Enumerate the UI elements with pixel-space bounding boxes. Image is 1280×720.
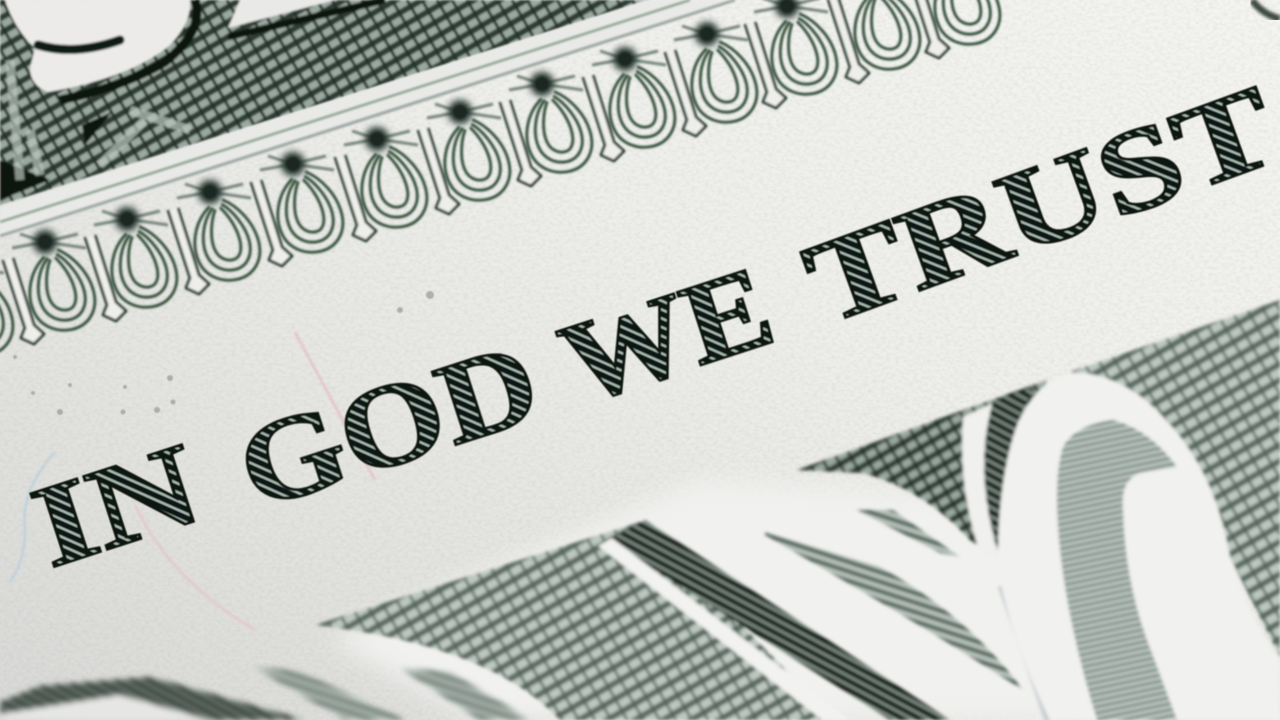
word TRUST: TRUST	[790, 61, 1280, 349]
dark wedge	[0, 160, 50, 200]
light strip under band	[0, 0, 735, 238]
long leaf	[765, 532, 1023, 690]
word IN: IN	[18, 419, 215, 593]
lower center leaf	[315, 520, 950, 720]
light ribs	[10, 60, 190, 180]
upper white sliver	[228, 0, 335, 28]
top-right corner mark	[1252, 0, 1280, 19]
white curved petal	[997, 373, 1280, 720]
guilloche oval border	[0, 0, 1006, 369]
bottom-left leaf	[0, 666, 530, 720]
motto: IN GOD WE TRUST	[18, 61, 1280, 593]
bright glow lower area	[330, 480, 1060, 720]
strip lower grey line	[0, 0, 735, 236]
paper speckles	[13, 291, 502, 415]
top-left engraved dark band	[0, 0, 650, 205]
word GOD: GOD	[223, 317, 554, 535]
word WE: WE	[546, 242, 788, 430]
grey stem line	[1003, 585, 1050, 720]
small leaf	[857, 510, 960, 557]
scroll inner stroke	[38, 40, 120, 49]
white sliver	[962, 403, 1000, 560]
strip green line	[0, 0, 690, 222]
paper fibres	[10, 332, 375, 630]
inner petal hatch	[1057, 420, 1177, 720]
lower right leaves	[765, 300, 1280, 720]
black scroll outline	[60, 0, 197, 100]
white scroll shape	[5, 0, 190, 92]
right hatch field	[1070, 300, 1280, 657]
black sliver	[228, 0, 385, 37]
dark stripe	[985, 387, 1036, 550]
